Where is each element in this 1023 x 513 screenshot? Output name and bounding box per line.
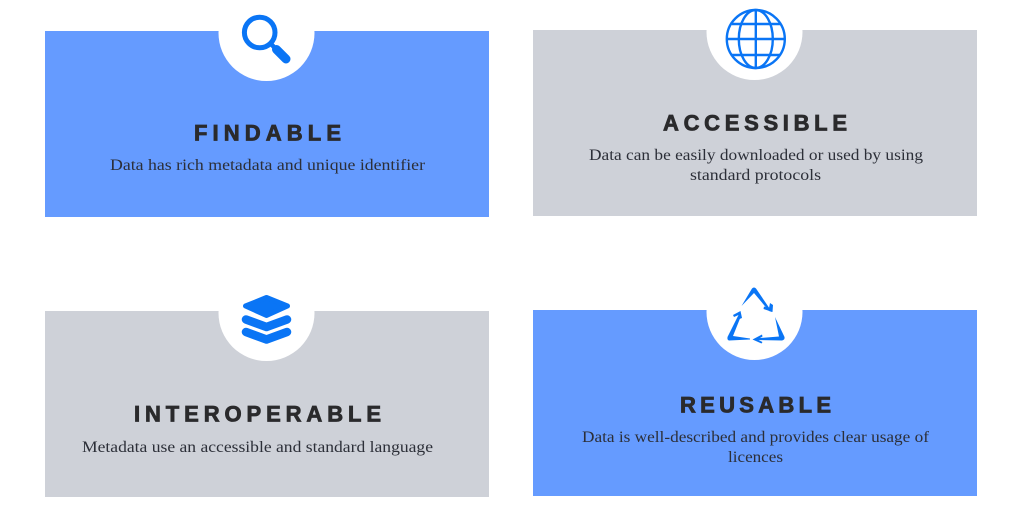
panel: accessible: standard protocols bbox=[690, 167, 821, 184]
text: interoperable description: Metadata use an accessible and standard language bbox=[82, 439, 433, 456]
icon: layers bbox=[246, 298, 288, 340]
panel: accessible bbox=[533, 0, 977, 216]
heading: interoperable: INTEROPERABLE bbox=[134, 402, 381, 426]
heading: findable: FINDABLE bbox=[194, 120, 341, 146]
heading: reusable: REUSABLE bbox=[680, 392, 831, 418]
text: reusable description: Data is well-described and provides clear usage of bbox=[582, 429, 930, 446]
panel: reusable: licences bbox=[728, 449, 783, 466]
icon: recycle arrows bbox=[727, 288, 785, 344]
panel: reusable bbox=[533, 264, 977, 496]
icon: magnifying glass bbox=[244, 17, 286, 59]
panel: interoperable bbox=[45, 265, 489, 497]
heading: accessible: ACCESSIBLE bbox=[663, 110, 847, 136]
text: accessible description: Data can be easily downloaded or used by using bbox=[589, 147, 923, 164]
panel: findable bbox=[45, 0, 489, 217]
text: findable description: Data has rich metadata and unique identifier bbox=[110, 157, 426, 174]
icon: globe bbox=[727, 10, 785, 68]
